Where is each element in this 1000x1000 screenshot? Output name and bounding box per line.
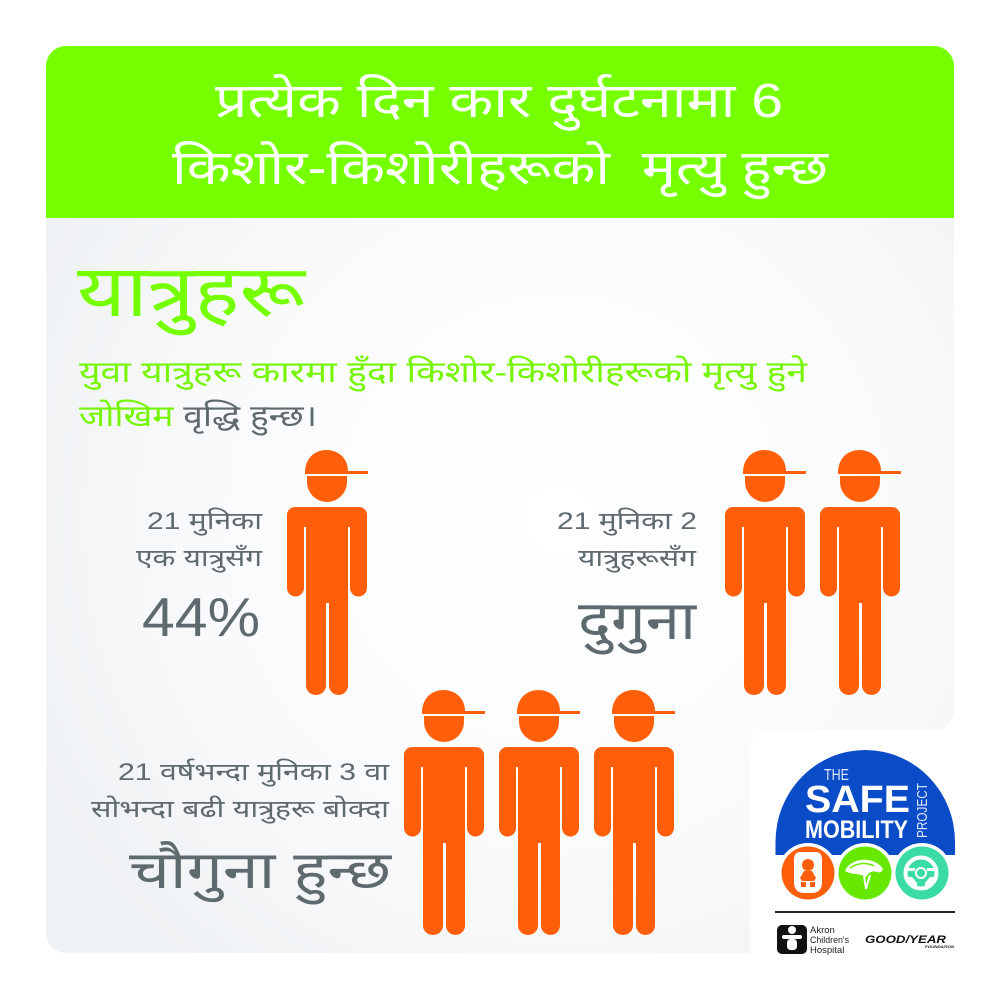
- value: दुगुना: [578, 591, 697, 655]
- text: Goodyear Foundation: FOUNDATION: [925, 944, 954, 949]
- logo text: [805, 767, 931, 844]
- title line 2: किशोर-किशोरीहरूको मृत्यु हुन्छ: [172, 141, 830, 200]
- stat: three passengers: [91, 758, 393, 905]
- title line 1: प्रत्येक दिन कार दुर्घटनामा 6: [215, 73, 783, 131]
- text block: intro: [79, 354, 809, 436]
- logo text: SAFE: [805, 779, 910, 821]
- logo text: PROJECT: [914, 783, 931, 838]
- text: Akron Children's Hospital: [810, 925, 849, 956]
- value: 44%: [142, 586, 260, 648]
- heading: passengers: यात्रुहरू: [77, 252, 307, 336]
- icon: child seat: [778, 843, 838, 903]
- blue semicircle badge: [776, 750, 955, 855]
- intro line 2: जोखिम वृद्धि हुन्छ।: [79, 399, 317, 436]
- icon: one passenger: [287, 450, 368, 695]
- text: Goodyear Foundation: GOOD/YEAR: [865, 934, 946, 946]
- intro line 1: युवा यात्रुहरू कारमा हुँदा किशोर-किशोरीहरूको मृत्यु हुने: [79, 354, 809, 392]
- icons: two passengers: [725, 450, 901, 695]
- panel: background card: [46, 218, 954, 953]
- icon: bike helmet: [835, 843, 895, 903]
- logo text: THE: [824, 767, 849, 784]
- text: Akron Children's Hospital: Akron: [810, 925, 835, 936]
- label line 1: 21 वर्षभन्दा मुनिका 3 वा: [118, 758, 390, 787]
- divider line: [775, 911, 955, 913]
- panel: green header: [46, 46, 954, 218]
- icon: Akron Children's Hospital: [777, 925, 807, 954]
- value: चौगुना हुन्छ: [129, 842, 393, 905]
- text: Goodyear Foundation: [865, 934, 954, 949]
- icon: steering wheel: [892, 843, 952, 903]
- stat: one passenger: [136, 507, 263, 648]
- label line 1: 21 मुनिका: [147, 507, 263, 536]
- label line 2: सोभन्दा बढी यात्रुहरू बोक्दा: [91, 795, 390, 824]
- icons: three passengers: [404, 690, 675, 935]
- logo text: MOBILITY: [805, 816, 908, 844]
- logo: Safe Mobility Project: [775, 750, 955, 956]
- label line 2: यात्रुहरूसँग: [578, 544, 697, 573]
- text: Akron Children's Hospital: Hospital: [810, 945, 844, 956]
- stat: two passengers: [557, 507, 697, 655]
- label line 1: 21 मुनिका 2: [557, 507, 697, 536]
- text: Akron Children's Hospital: Children's: [810, 935, 849, 946]
- label line 2: एक यात्रुसँग: [136, 544, 263, 573]
